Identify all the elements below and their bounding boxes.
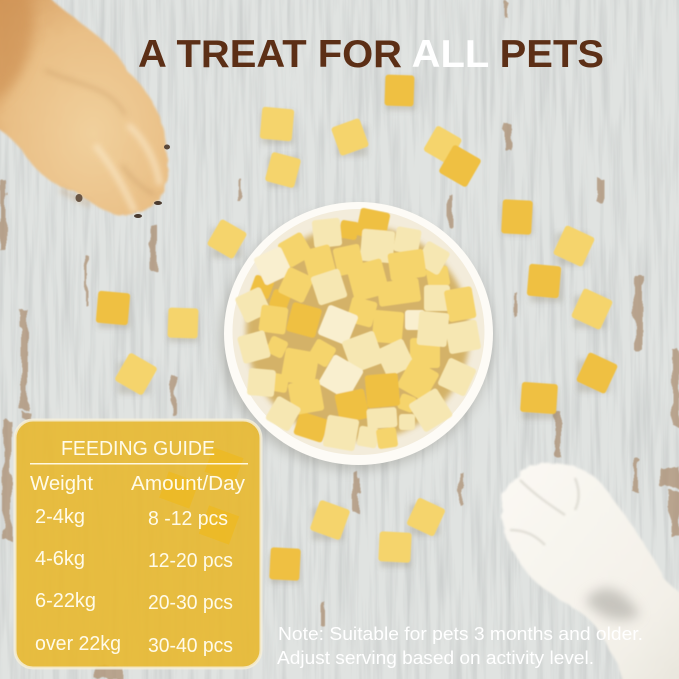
bowl of treats xyxy=(220,202,493,470)
scattered treat cubes xyxy=(96,75,618,583)
treats in bowl xyxy=(234,207,481,452)
amount column: 20-30 pcs xyxy=(148,592,233,614)
column headers xyxy=(30,473,245,495)
weight column: 6-22kg xyxy=(35,590,96,612)
amount column: 8 -12 pcs xyxy=(148,508,228,530)
column headers: Amount/Day xyxy=(131,473,245,495)
note text xyxy=(277,624,643,668)
title: A TREAT FOR ALL PETS xyxy=(138,33,604,76)
weight column: 4-6kg xyxy=(35,548,85,570)
cubes showing through panel xyxy=(159,447,243,545)
panel: feeding guide xyxy=(15,420,261,668)
bowl xyxy=(220,202,493,470)
weight column: over 22kg xyxy=(35,633,121,655)
amount column: 12-20 pcs xyxy=(148,550,233,572)
column headers: Weight xyxy=(30,473,93,495)
weight column xyxy=(35,506,121,655)
note text: Adjust serving based on activity level. xyxy=(277,648,594,668)
note text: Note: Suitable for pets 3 months and older. xyxy=(278,624,643,644)
icon: dog paw xyxy=(0,0,170,218)
heading: feeding guide: FEEDING GUIDE xyxy=(61,438,215,460)
icon: cat paw xyxy=(502,462,679,679)
amount column xyxy=(148,508,233,657)
amount column: 30-40 pcs xyxy=(148,635,233,657)
weight column: 2-4kg xyxy=(35,506,85,528)
